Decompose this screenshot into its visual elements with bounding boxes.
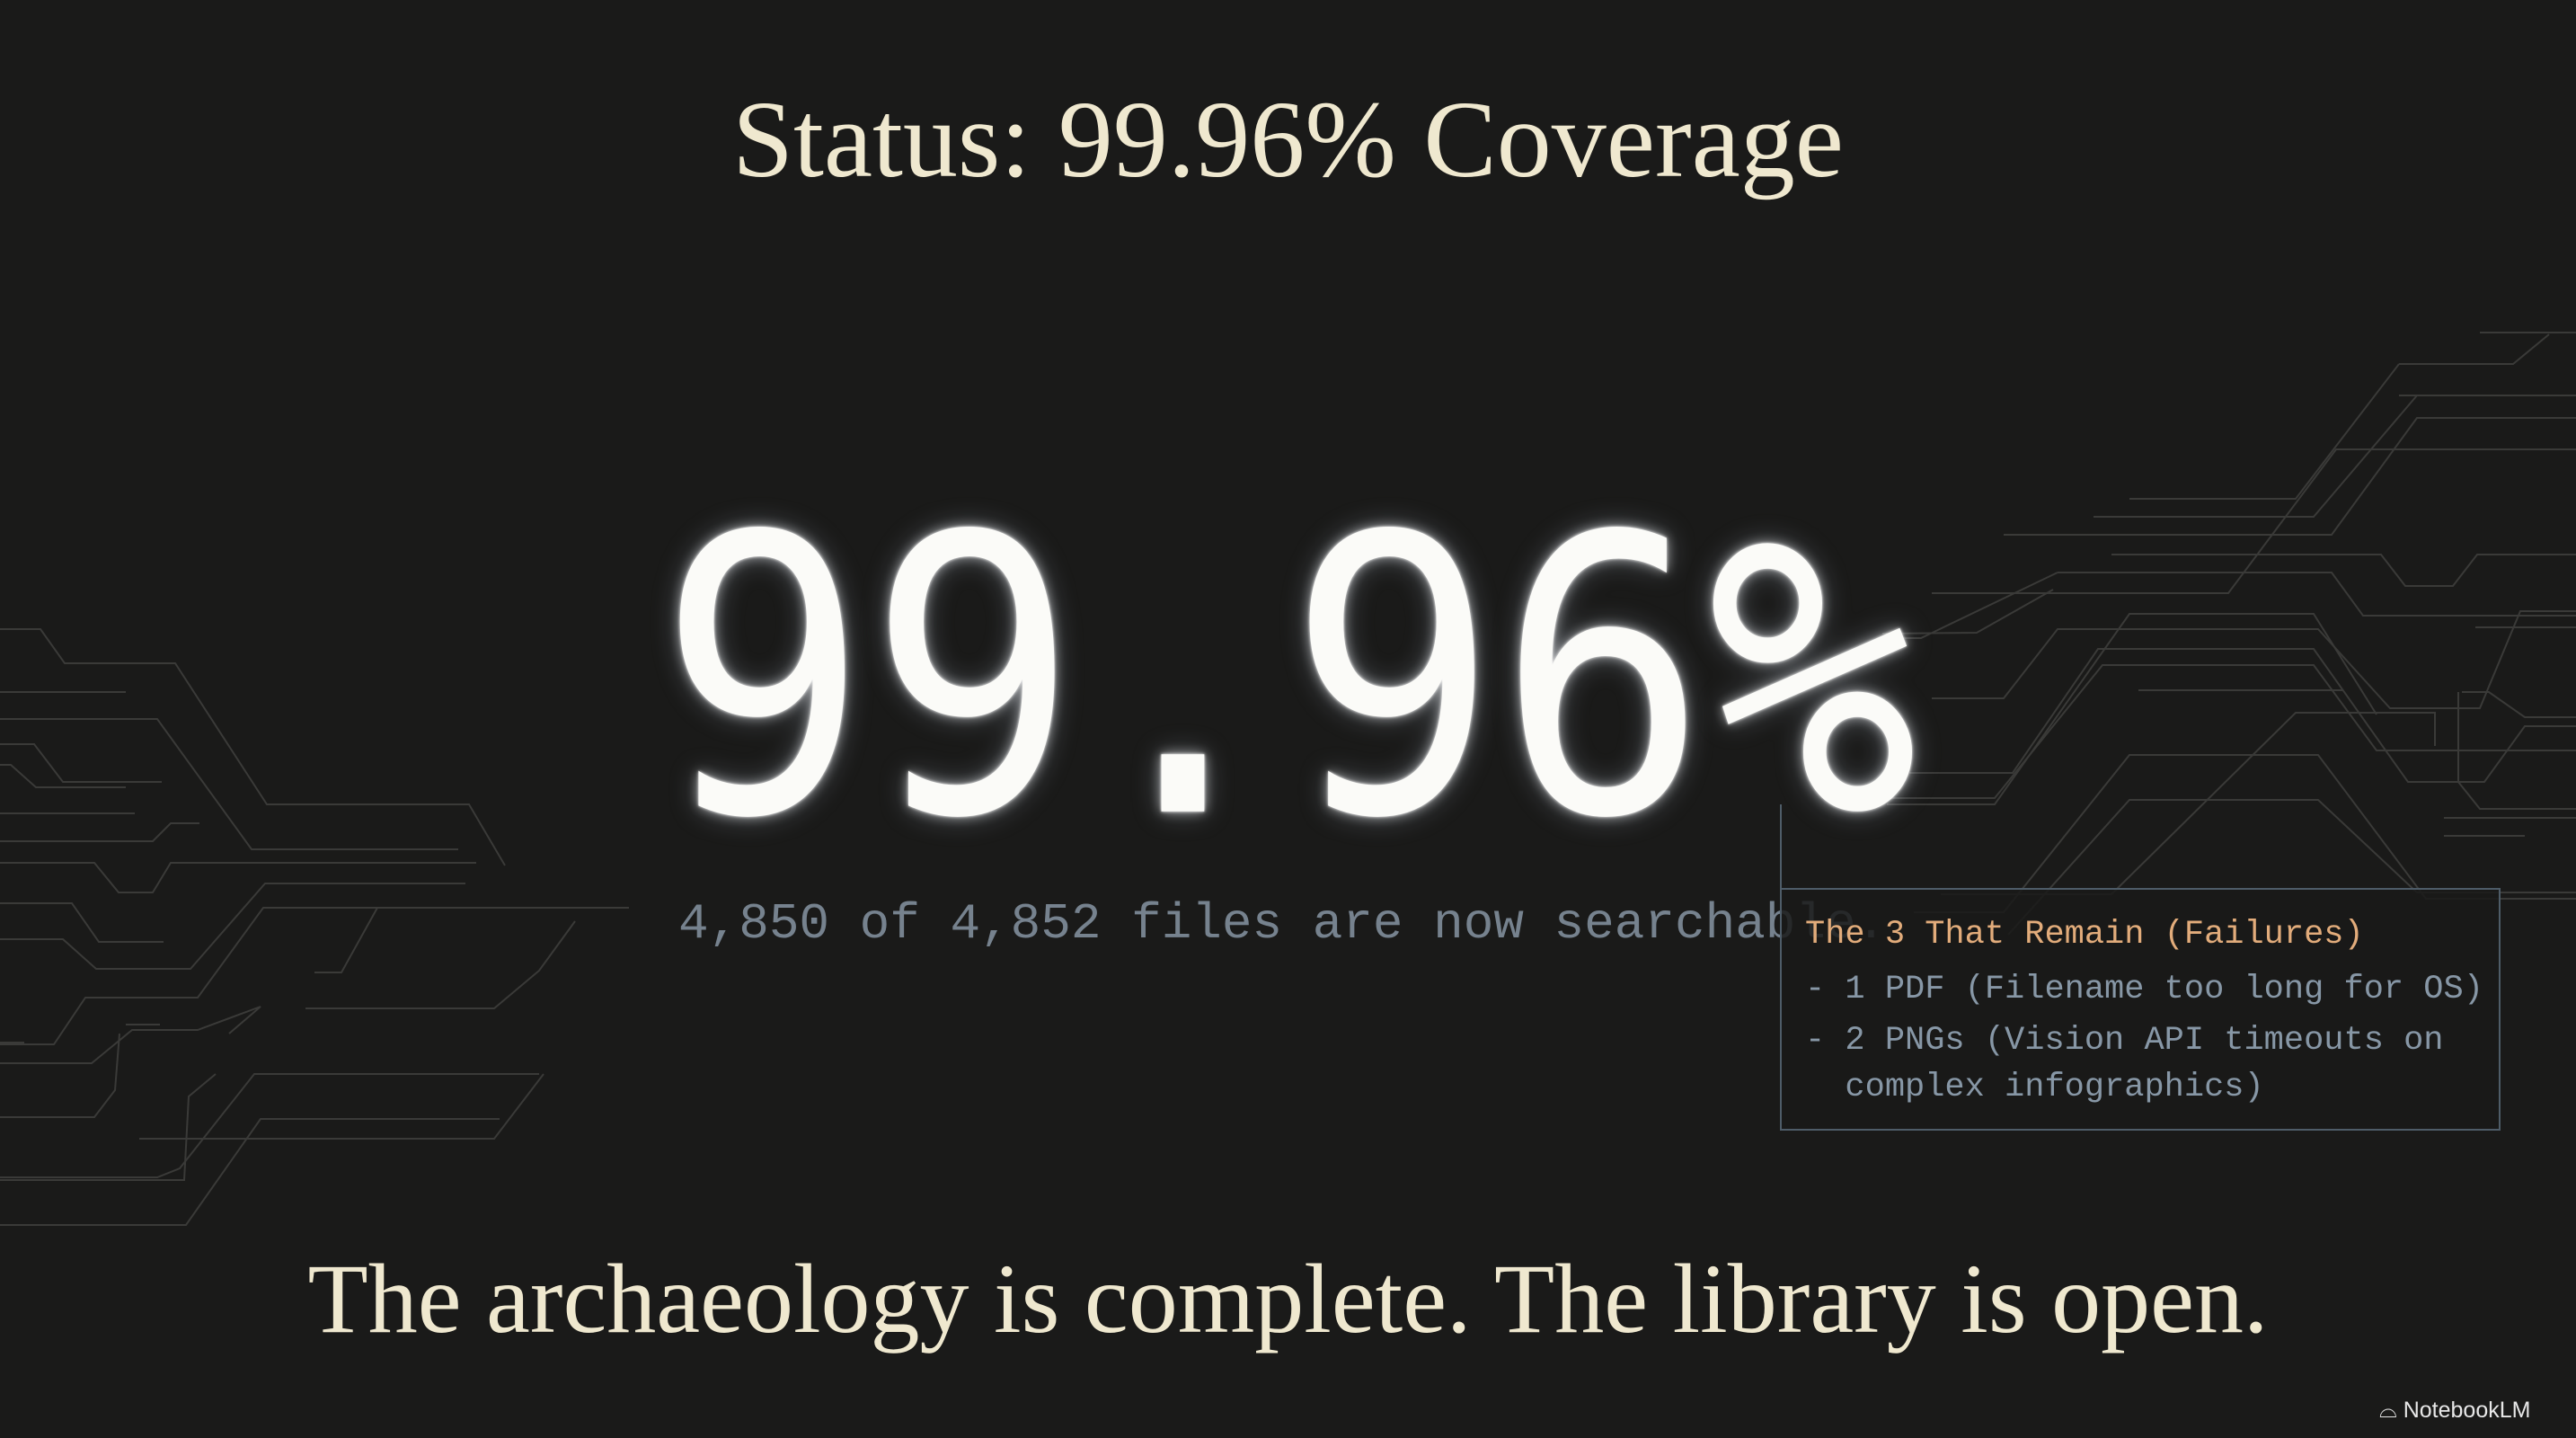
big percentage number: 99.96% [659,456,1917,902]
subtitle: files searchable: 4,850 of 4,852 files are now searchable. [678,895,1886,953]
failure item: PNGs [1805,1022,2444,1106]
title: Status: 99.96% Coverage [732,79,1844,200]
failures heading: The 3 That Remain (Failures) [1805,916,2364,954]
failure item: PDF: - 1 PDF (Filename too long for OS) [1805,971,2483,1008]
failure item: PNGs: complex infographics) [1845,1069,2264,1106]
closing statement: The archaeology is complete. The library is open. [308,1244,2268,1354]
connector line to failures box [1780,804,1782,890]
panel: failures box [1780,888,2501,1131]
failure item: PNGs: - 2 PNGs (Vision API timeouts on [1805,1022,2444,1060]
watermark: NotebookLM: ⌓ NotebookLM [2379,1398,2530,1423]
